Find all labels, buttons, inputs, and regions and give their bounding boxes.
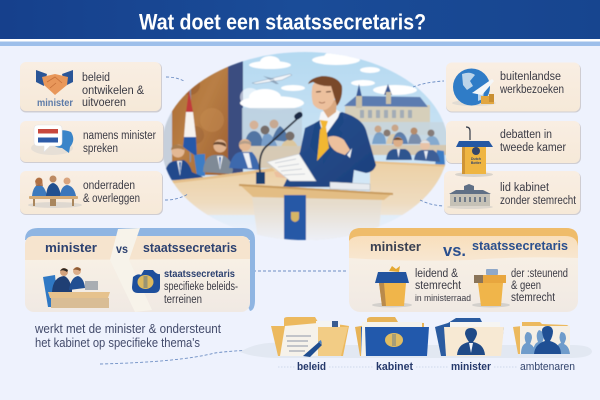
label: ambtenaren: ambtenaren bbox=[520, 361, 575, 373]
card: debatten in tweede kamer: debatten in bbox=[500, 129, 552, 141]
card: lid kabinet zonder stemrecht bbox=[444, 171, 581, 215]
panel: minister vs staatssecretaris (left) bbox=[25, 228, 255, 312]
document in hand bbox=[267, 154, 316, 181]
icon: people at a table bbox=[28, 176, 82, 208]
panel: minister vs staatssecretaris (right): staatssecretaris bbox=[472, 238, 568, 253]
card: beleid ontwikkelen: ontwikelen & bbox=[82, 85, 144, 97]
panel: minister vs staatssecretaris (right): stemrecht bbox=[415, 280, 462, 292]
icon: government building bbox=[447, 184, 493, 209]
card: beleid ontwikkelen: beleid bbox=[82, 72, 110, 84]
panel: minister vs staatssecretaris (right): leidend & bbox=[415, 268, 458, 280]
gallery: public behind bbox=[242, 108, 450, 168]
dutch flag bbox=[183, 87, 197, 162]
folder: beleid bbox=[271, 317, 349, 357]
panel: minister vs staatssecretaris (right): der :steunend bbox=[511, 268, 568, 280]
bottom fade bbox=[201, 209, 284, 240]
card: onderraden en overleggen: & overleggen bbox=[83, 193, 140, 205]
left desk bbox=[160, 168, 300, 215]
icon: speech bubbles with flag bbox=[31, 125, 73, 155]
icon: two men at a desk bbox=[43, 267, 110, 308]
card: buitenlandse werkbezoeken: werkbezoeken bbox=[499, 84, 564, 96]
folder: minister bbox=[435, 318, 504, 356]
card: lid kabinet zonder stemrecht: lid kabinet bbox=[500, 182, 550, 194]
panel: minister vs staatssecretaris (right): vs. bbox=[443, 241, 466, 260]
vs divider bbox=[110, 228, 152, 312]
blue chairs bbox=[194, 150, 445, 176]
panel: minister vs staatssecretaris (left): staatssecretaris bbox=[143, 240, 237, 255]
icon: blue coat-of-arms badge bbox=[132, 270, 160, 293]
panel: minister vs staatssecretaris (right): minister bbox=[370, 239, 421, 254]
icon: handshake bbox=[36, 70, 73, 95]
card: beleid ontwikkelen: uitvoeren bbox=[82, 97, 126, 109]
folder: ambtenaren bbox=[513, 322, 570, 354]
label: kabinet: kabinet bbox=[376, 361, 413, 373]
microphone bbox=[256, 111, 304, 184]
panel: minister vs staatssecretaris (right): stemrecht bbox=[511, 292, 556, 304]
label: beleid: beleid bbox=[297, 361, 326, 373]
text: toelichting: het kabinet op specifieke thema's bbox=[35, 336, 200, 350]
building bbox=[344, 84, 430, 135]
label: minister: minister bbox=[451, 361, 492, 373]
speaker bbox=[274, 76, 376, 187]
panel: minister vs staatssecretaris (left): specifieke beleids- bbox=[164, 281, 238, 293]
right desk and people bbox=[370, 137, 450, 215]
airplane bbox=[252, 74, 292, 84]
card: onderraden en overleggen bbox=[20, 171, 163, 215]
icon: globe with plane bbox=[452, 68, 496, 106]
card: debatten in tweede kamer: tweede kamer bbox=[500, 142, 566, 154]
icon: lectern with microphone: Dutch bbox=[471, 157, 481, 161]
card: namens minister spreken bbox=[20, 121, 164, 163]
clouds bbox=[240, 51, 417, 110]
card: lid kabinet zonder stemrecht: zonder stemrecht bbox=[500, 195, 577, 207]
panel: minister vs staatssecretaris (right): in ministerraad bbox=[415, 293, 471, 303]
text: toelichting: werkt met de minister & ondersteunt bbox=[34, 322, 221, 336]
dashed connectors bbox=[100, 77, 446, 364]
central illustration: speaker in parliament bbox=[160, 50, 450, 245]
folder shelf shadow bbox=[240, 343, 592, 358]
left seated people bbox=[165, 139, 260, 181]
card: namens minister spreken: namens minister bbox=[83, 130, 156, 142]
title banner: Wat doet een staatssecretaris? bbox=[139, 10, 426, 34]
icon: staatssecretaris lectern bbox=[472, 269, 510, 308]
lectern bbox=[239, 182, 393, 241]
card: beleid ontwikkelen: minister bbox=[37, 98, 73, 109]
card: onderraden en overleggen: onderraden bbox=[83, 180, 135, 192]
card: buitenlandse werkbezoeken: buitenlandse bbox=[500, 71, 561, 83]
wall and pillar bbox=[164, 60, 244, 176]
panel: minister vs staatssecretaris (right) bbox=[349, 228, 578, 312]
panel: minister vs staatssecretaris (left): terreinen bbox=[164, 294, 202, 306]
icon: minister lectern bbox=[372, 266, 412, 308]
panel: minister vs staatssecretaris (right): & geen bbox=[511, 280, 541, 292]
icon: lectern with microphone bbox=[455, 127, 493, 177]
panel: minister vs staatssecretaris (left): minister bbox=[45, 240, 97, 255]
folder: kabinet bbox=[355, 317, 429, 356]
card: debatten in tweede kamer bbox=[446, 121, 581, 164]
text: toelichting bbox=[34, 322, 221, 350]
card: beleid ontwikkelen bbox=[20, 62, 162, 112]
card: namens minister spreken: spreken bbox=[83, 143, 118, 155]
title banner bbox=[0, 0, 600, 46]
card: buitenlandse werkbezoeken bbox=[446, 62, 581, 112]
icon: lectern with microphone: Botter bbox=[471, 161, 482, 165]
panel: minister vs staatssecretaris (left): vs bbox=[116, 242, 128, 256]
panel: minister vs staatssecretaris (left): staatssecretaris bbox=[164, 268, 235, 280]
